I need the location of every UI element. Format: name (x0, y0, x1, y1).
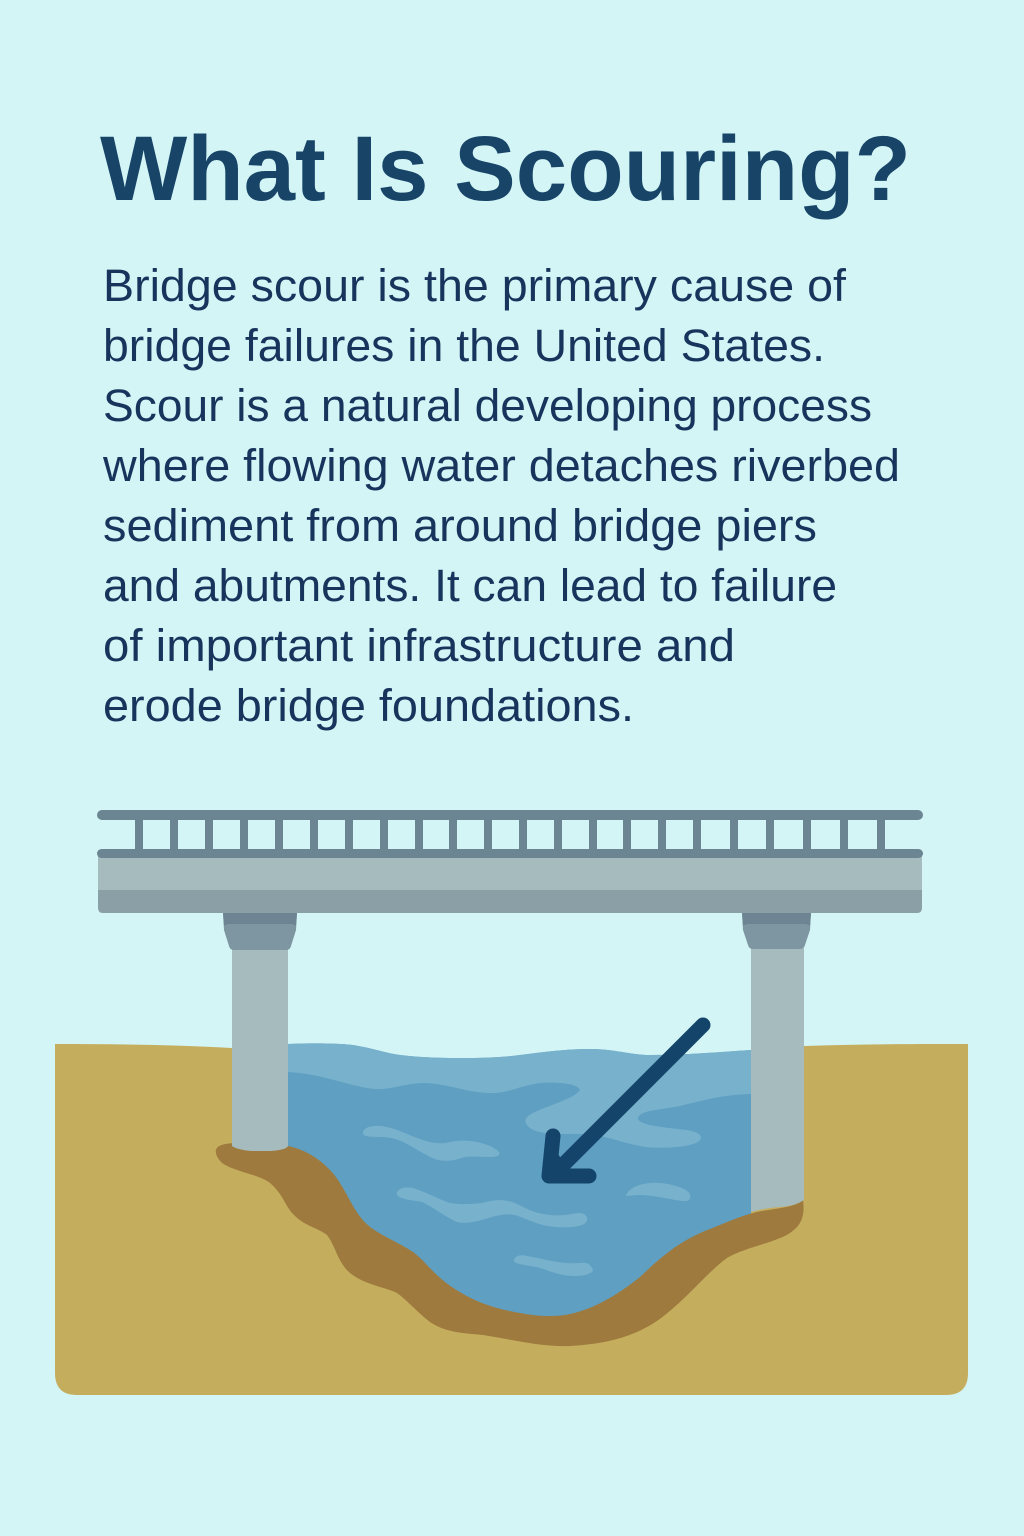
arrow: water flow toward the scour (549, 1025, 703, 1176)
title: What Is Scouring? (100, 118, 911, 220)
body paragraph (102, 260, 900, 731)
right bridge pier (751, 948, 804, 1212)
scoured sediment (216, 1143, 804, 1346)
left pier cap (223, 913, 297, 950)
body paragraph: and abutments. It can lead to failure (103, 560, 837, 611)
body paragraph: Scour is a natural developing process (103, 380, 872, 431)
right pier cap (742, 913, 811, 949)
ground: riverbank soil (55, 1044, 968, 1395)
railing (97, 810, 923, 858)
body paragraph: erode bridge foundations. (103, 680, 634, 731)
left bridge pier (232, 948, 288, 1151)
body paragraph: where flowing water detaches riverbed (102, 440, 900, 491)
body paragraph: bridge failures in the United States. (103, 320, 825, 371)
bridge (97, 810, 923, 950)
water highlight streaks (363, 1126, 690, 1276)
deep water body (288, 1043, 751, 1325)
body paragraph: sediment from around bridge piers (103, 500, 817, 551)
water (288, 1043, 751, 1325)
bridge deck (98, 856, 922, 913)
body paragraph: Bridge scour is the primary cause of (103, 260, 847, 311)
body paragraph: of important infrastructure and (103, 620, 735, 671)
light surface band (288, 1043, 751, 1148)
